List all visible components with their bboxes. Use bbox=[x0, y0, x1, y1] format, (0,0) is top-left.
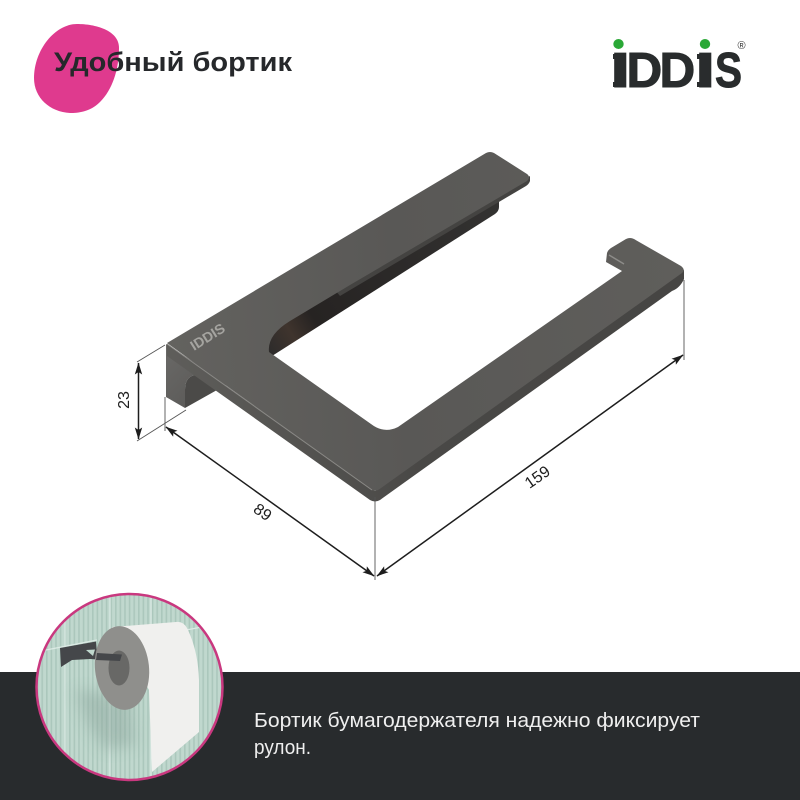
dimension: height 23 bbox=[116, 345, 186, 441]
dimension: length 159 bbox=[377, 280, 684, 576]
heading text: Удобный бортик bbox=[54, 47, 293, 77]
dimensions bbox=[116, 280, 684, 580]
logo wordmark: I bbox=[610, 43, 630, 98]
inner wall of the top arm bbox=[268, 196, 499, 356]
dimension: height 23: 23 bbox=[116, 391, 133, 409]
roll hole bbox=[108, 650, 130, 686]
registered mark: ® bbox=[738, 40, 746, 52]
roll side bbox=[94, 626, 150, 710]
wall shadow bbox=[75, 690, 135, 750]
logo slab serifs bbox=[613, 54, 710, 87]
holder gap bbox=[86, 650, 95, 656]
caption line 1: Бортик бумагодержателя надежно фиксирует bbox=[254, 709, 701, 732]
dimension: width 89 bbox=[166, 427, 375, 580]
logo wordmark bbox=[610, 43, 742, 98]
logo wordmark: S bbox=[715, 43, 742, 98]
tab highlight bbox=[609, 255, 624, 264]
arch inner shadow bbox=[185, 375, 217, 408]
pink ring bbox=[36, 594, 222, 780]
engraved logo: IDDIS bbox=[187, 320, 228, 354]
left end face with arch bbox=[166, 344, 228, 408]
pink blob bbox=[34, 24, 119, 113]
logo green dots bbox=[613, 39, 710, 49]
caption bbox=[254, 709, 701, 759]
logo wordmark: D bbox=[660, 43, 695, 98]
inset photo: roll on holder bbox=[36, 594, 224, 782]
front and right thickness edge bbox=[167, 270, 684, 502]
top arm thickness edge bbox=[335, 176, 530, 296]
caption line 2: рулон. bbox=[254, 736, 311, 759]
top surface bbox=[167, 152, 684, 491]
holder bar bbox=[60, 642, 97, 667]
IDDIS logo bbox=[610, 39, 746, 98]
title with pink blob bbox=[34, 24, 293, 113]
ribbed tile wall bbox=[36, 594, 224, 782]
logo wordmark: D bbox=[626, 43, 662, 98]
front edge highlight bbox=[167, 344, 372, 490]
product: paper holder bbox=[166, 152, 684, 502]
tile joints bbox=[46, 597, 200, 776]
logo wordmark: I bbox=[695, 43, 716, 98]
holder bar end bbox=[96, 653, 122, 661]
dimension: length 159: 159 bbox=[522, 463, 554, 492]
photo content bbox=[36, 594, 224, 782]
dimension: width 89: 89 bbox=[250, 501, 274, 525]
bottom dark band bbox=[0, 672, 800, 800]
paper sheet bbox=[112, 622, 199, 772]
